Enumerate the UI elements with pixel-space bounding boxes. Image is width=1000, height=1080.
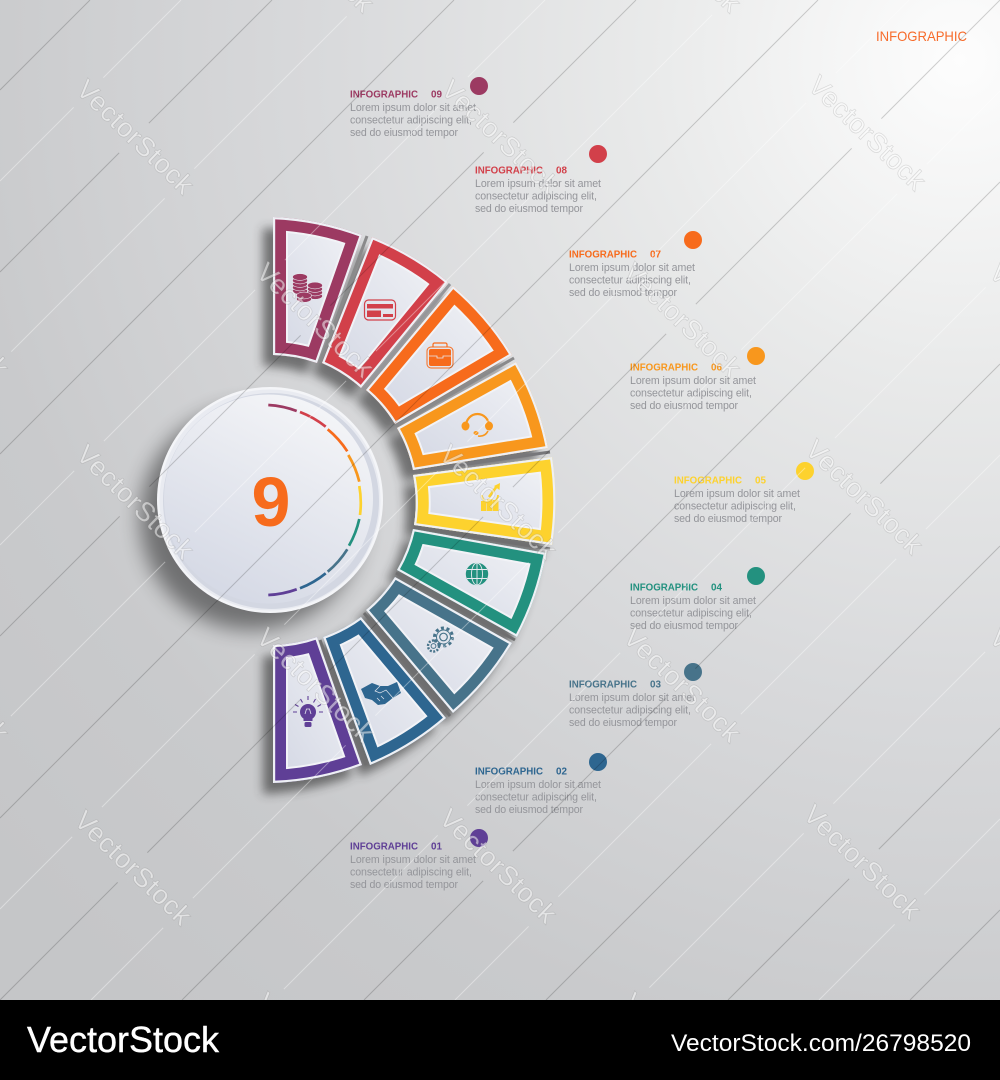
item 06 [630,347,765,412]
footer bar: VectorStock.com/26798520 [671,1030,971,1057]
watermarks: VectorStock [251,622,380,748]
watermarks: VectorStock [618,257,747,383]
item 09: consectetur adipiscing elit, [350,114,472,126]
item 03: 03 [650,680,661,690]
item 08: Lorem ipsum dolor sit amet [475,178,601,190]
icon: handshake [361,682,401,705]
item 09: Lorem ipsum dolor sit amet [350,102,476,114]
icon: growth chart [481,483,500,511]
item 03: sed do eiusmod tempor [569,717,677,729]
item 04: consectetur adipiscing elit, [630,608,752,620]
item 03: consectetur adipiscing elit, [569,704,691,716]
item 04: 04 [711,582,722,594]
icon: light bulb [293,696,323,727]
item 07: 07 [650,250,661,260]
item 02 [475,753,607,816]
item 07: Lorem ipsum dolor sit amet [569,262,695,274]
item 07 [569,231,702,299]
watermarks: VectorStock [71,439,200,565]
item 07: consectetur adipiscing elit, [569,274,691,286]
watermarks: VectorStock [251,257,380,383]
icon: briefcase [427,343,453,368]
item 04: INFOGRAPHIC [630,582,698,594]
segment 9 plum [273,217,362,363]
center number: 9 [252,463,290,541]
watermarks: VectorStock [798,799,927,925]
item 08: 08 [556,166,567,176]
item 03: INFOGRAPHIC [569,680,637,690]
item 09 [350,77,488,139]
item 08: sed do eiusmod tempor [475,203,583,215]
circle and segment shadows [140,228,545,794]
icon: credit card [364,300,396,320]
item 01 [350,829,488,891]
item 04: Lorem ipsum dolor sit amet [630,595,756,607]
segment 2 blue [323,617,446,765]
icon: headset [462,414,493,436]
item 08: INFOGRAPHIC [475,166,543,176]
segment 8 red [322,237,448,388]
item 05: 05 [755,476,766,486]
item 05: INFOGRAPHIC [674,476,742,486]
item 01: consectetur adipiscing elit, [350,866,472,878]
item 08 [475,145,607,215]
item 06: consectetur adipiscing elit, [630,388,752,400]
item 02: sed do eiusmod tempor [475,804,583,816]
watermarks: VectorStock [69,805,198,931]
item 02: Lorem ipsum dolor sit amet [475,779,601,791]
progress dashes [268,405,361,595]
watermarks: VectorStock [803,70,932,196]
item 09: sed do eiusmod tempor [350,127,458,139]
item 03: Lorem ipsum dolor sit amet [569,692,695,704]
watermarks: VectorStock [618,622,747,748]
watermarks: VectorStock [436,74,565,200]
heading: INFOGRAPHIC [876,28,967,44]
watermarks: VectorStock [800,434,929,560]
item 01: 01 [431,842,442,852]
center circle [157,387,383,613]
item 07: INFOGRAPHIC [569,250,637,260]
item 02: 02 [556,766,567,778]
item 04 [630,567,765,632]
footer bar: VectorStock [27,1019,220,1060]
segment 5 yellow [413,457,555,545]
item 02: INFOGRAPHIC [475,766,543,778]
segment 6 amber [397,362,548,470]
item 07: sed do eiusmod tempor [569,287,677,299]
item 01: Lorem ipsum dolor sit amet [350,854,476,866]
item 05 [674,462,814,525]
icon: coins [292,274,322,302]
item 08: consectetur adipiscing elit, [475,190,597,202]
item 05: consectetur adipiscing elit, [674,500,796,512]
gaps between segments [320,236,550,765]
watermarks: VectorStock [434,803,563,929]
watermarks: VectorStock [434,439,563,565]
icon: gears [428,628,452,652]
item 05: Lorem ipsum dolor sit amet [674,488,800,500]
segment 7 orange [366,286,512,424]
icon: globe [466,563,488,585]
item 09: INFOGRAPHIC [350,90,418,100]
item 06: Lorem ipsum dolor sit amet [630,375,756,387]
segment 3 slate [366,577,512,713]
item 05: sed do eiusmod tempor [674,513,782,525]
segment 1 purple [273,637,362,783]
item 06: 06 [711,362,722,374]
item 04: sed do eiusmod tempor [630,620,738,632]
item 02: consectetur adipiscing elit, [475,792,597,804]
item 06: INFOGRAPHIC [630,362,698,374]
item 09: 09 [431,90,442,100]
segment 4 teal [397,529,546,637]
footer bar [0,1000,1000,1080]
item 01: INFOGRAPHIC [350,842,418,852]
item 03 [569,663,702,729]
item 06: sed do eiusmod tempor [630,400,738,412]
watermarks: VectorStock [71,74,200,200]
item 01: sed do eiusmod tempor [350,879,458,891]
